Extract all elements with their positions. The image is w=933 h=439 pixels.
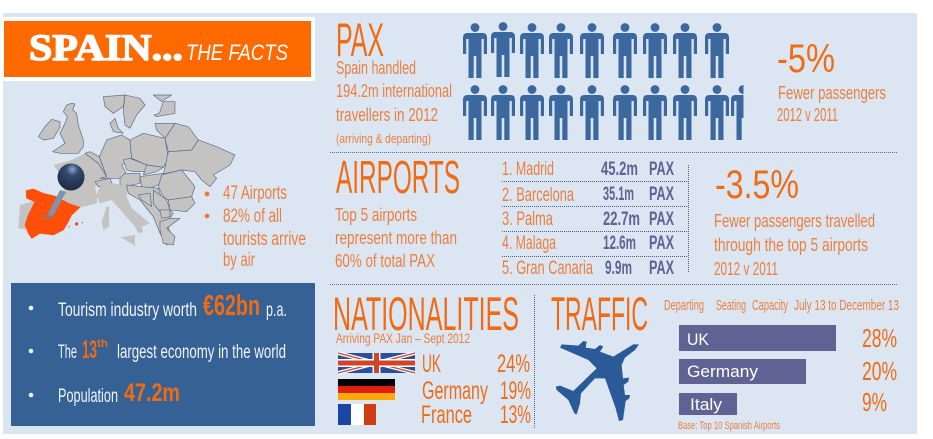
icon: airplane: [556, 341, 639, 421]
airports table: 45.2m: [601, 159, 638, 180]
airports table: [502, 159, 688, 279]
stat: minus 5 percent: Fewer passengers: [778, 83, 886, 103]
text: TRAFFIC: [551, 287, 648, 340]
airports table: PAX: [649, 233, 674, 254]
stat: minus 3.5 percent: through the top 5 airports: [714, 235, 868, 255]
airports table: 1. Madrid: [502, 159, 554, 180]
bar chart: departing seat capacity: 20%: [862, 356, 897, 386]
footnote: Base: Top 10 Spanish Airports: [678, 420, 780, 432]
airports table: 35.1m: [603, 184, 634, 205]
nationalities list: France: [421, 401, 472, 429]
airports table: 5. Gran Canaria: [502, 258, 593, 279]
airports table: PAX: [649, 159, 674, 180]
airports table: 22.7m: [603, 209, 640, 230]
flag: UK: [338, 353, 415, 373]
airports table: 4. Malaga: [502, 233, 556, 254]
stat: minus 3.5 percent: [714, 163, 875, 279]
stat: minus 5 percent: -5%: [777, 37, 835, 81]
title banner: SPAIN...: [29, 28, 183, 69]
traffic subtitle: Capacity: [752, 297, 788, 314]
airports table: 3. Palma: [502, 209, 553, 230]
traffic subtitle: Departing: [664, 297, 704, 314]
nationalities list: UK: [422, 350, 441, 378]
PAX heading and text: travellers in 2012: [336, 105, 438, 125]
airports table: PAX: [649, 184, 674, 205]
airports table: 9.9m: [605, 258, 632, 279]
airports heading and text: 60% of total PAX: [335, 251, 435, 271]
bullets: airports: 47 Airports: [223, 183, 287, 204]
nationalities heading: [333, 287, 519, 346]
PAX heading and text: PAX: [336, 13, 384, 66]
PAX heading and text: (arriving & departing): [336, 131, 431, 146]
airports heading and text: [335, 151, 460, 271]
bar chart: departing seat capacity: Italy: [690, 395, 723, 414]
nationalities heading: NATIONALITIES: [333, 287, 519, 340]
bullets: airports: 82% of all: [223, 206, 282, 227]
nationalities heading: Arriving PAX Jan – Sept 2012: [336, 330, 470, 346]
airports table: 12.6m: [603, 233, 636, 254]
airports heading and text: represent more than: [335, 228, 457, 248]
stat: minus 5 percent: [777, 37, 886, 125]
airports heading and text: Top 5 airports: [335, 205, 417, 225]
nationalities list: [421, 350, 531, 429]
panel: key facts: 13: [82, 336, 97, 364]
stat: minus 5 percent: 2012 v 2011: [777, 105, 838, 125]
flag: France: [338, 404, 376, 425]
bar chart: departing seat capacity: 9%: [862, 387, 887, 417]
airports table: 2. Barcelona: [502, 185, 574, 206]
map of Europe with Spain highlighted: [18, 95, 235, 246]
airports table: PAX: [649, 258, 674, 279]
nationalities list: 24%: [497, 350, 530, 378]
nationalities list: Germany: [422, 377, 488, 405]
nationalities list: 19%: [500, 377, 531, 405]
title banner: THE FACTS: [186, 40, 288, 65]
bullets: airports: [205, 183, 306, 271]
bar chart: departing seat capacity: UK: [687, 330, 710, 349]
PAX heading and text: 194.2m international: [336, 81, 452, 101]
nationalities list: 13%: [500, 401, 531, 429]
bullets: airports: tourists arrive: [223, 229, 306, 250]
bar chart: departing seat capacity: 28%: [862, 323, 897, 353]
bar chart: departing seat capacity: [679, 323, 897, 417]
airports table: PAX: [649, 209, 674, 230]
bullets: airports: by air: [223, 250, 255, 271]
panel: key facts: €62bn: [203, 290, 260, 322]
traffic subtitle: [664, 297, 899, 314]
map pin: [42, 164, 84, 219]
panel: key facts: Population: [58, 386, 118, 407]
bar chart: departing seat capacity: Germany: [687, 362, 758, 381]
panel: key facts: 47.2m: [124, 379, 180, 407]
panel: key facts: th: [97, 338, 108, 350]
pictogram: passengers: [463, 22, 755, 140]
panel: key facts: The: [58, 342, 77, 363]
traffic subtitle: Seating: [716, 297, 746, 314]
panel: key facts: Tourism industry worth: [58, 300, 197, 321]
stat: minus 3.5 percent: Fewer passengers travelled: [714, 211, 875, 231]
stat: minus 3.5 percent: 2012 v 2011: [714, 259, 778, 279]
stat: minus 3.5 percent: -3.5%: [715, 163, 799, 207]
flag: Germany: [338, 379, 395, 400]
panel: key facts: largest economy in the world: [117, 342, 286, 363]
panel: key facts: p.a.: [266, 300, 287, 321]
PAX heading and text: Spain handled: [336, 58, 416, 78]
panel: key facts: [11, 283, 315, 426]
airports heading and text: AIRPORTS: [336, 151, 460, 203]
PAX heading and text: [336, 13, 452, 146]
title banner: [2, 17, 315, 81]
